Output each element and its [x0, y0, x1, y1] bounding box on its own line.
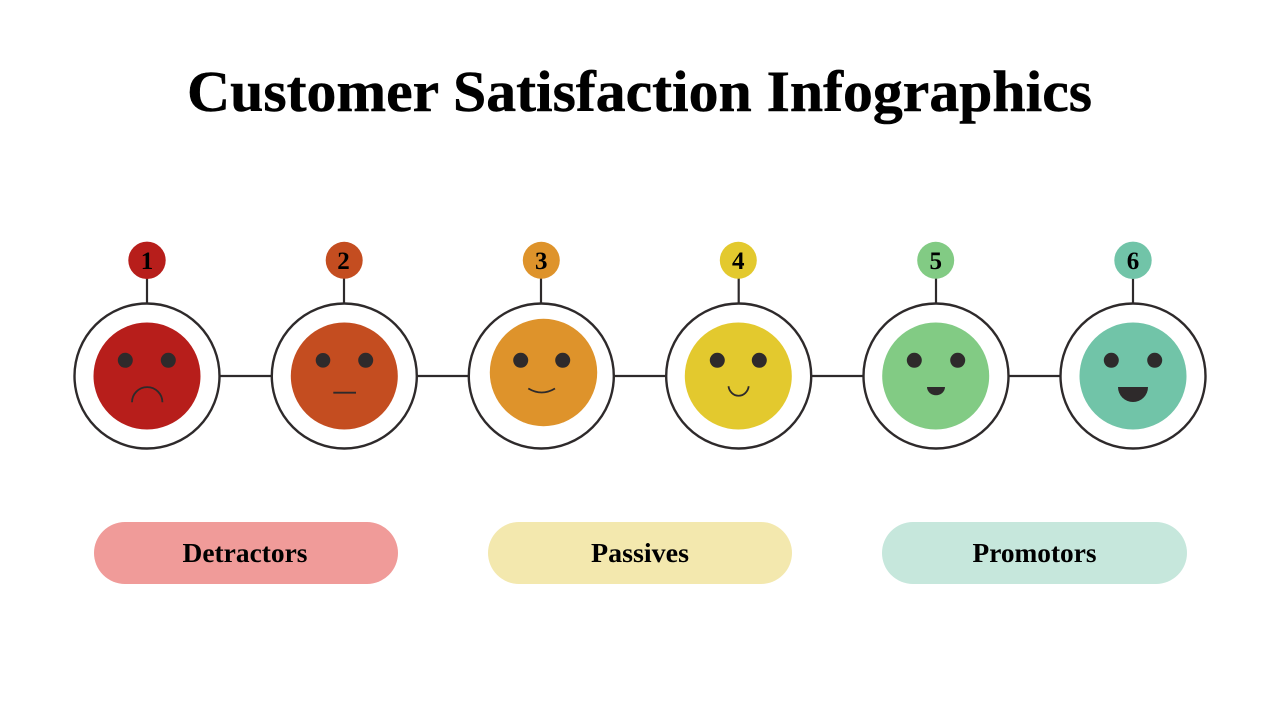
face 1: [94, 322, 200, 430]
badge 2: [326, 242, 363, 303]
badge 3: 3: [535, 248, 548, 275]
face 2: [291, 322, 398, 430]
step 5: happy face: [864, 242, 1008, 448]
face 6: [1080, 322, 1186, 430]
badge 1: 1: [141, 248, 153, 275]
badge 6: [1114, 242, 1152, 303]
badge 5: [917, 242, 954, 303]
step 3: neutral smile face: [469, 242, 614, 448]
ring 5: [864, 304, 1008, 448]
ring 4: [666, 304, 811, 448]
ring 2: [272, 304, 417, 448]
badge 5: 5: [929, 248, 942, 275]
label: promotors: [882, 522, 1187, 584]
face 4: [685, 322, 792, 430]
ring 6: [1060, 304, 1206, 448]
ring 1: [74, 304, 220, 448]
step 2: unhappy face: [272, 242, 417, 448]
badge 6: 6: [1127, 248, 1139, 275]
step 6: very happy face: [1060, 242, 1206, 448]
face 3: [490, 319, 597, 426]
badge 2: 2: [337, 248, 350, 275]
label: passives: [488, 522, 792, 584]
title: Customer Satisfaction Infographics: [187, 59, 1092, 124]
badge 4: [720, 242, 757, 303]
step 4: small smile face: [666, 242, 811, 448]
badge 4: 4: [732, 248, 745, 275]
timeline connector: [220, 375, 1060, 377]
badge 1: [128, 242, 166, 303]
badge 3: [523, 242, 560, 303]
face 5: [882, 322, 989, 430]
label: detractors: Detractors: [182, 538, 308, 568]
ring 3: [469, 304, 614, 448]
step 1: very unhappy face: [74, 242, 220, 448]
label: promotors: Promotors: [972, 538, 1096, 568]
label: passives: Passives: [591, 538, 689, 568]
label: detractors: [94, 522, 398, 584]
